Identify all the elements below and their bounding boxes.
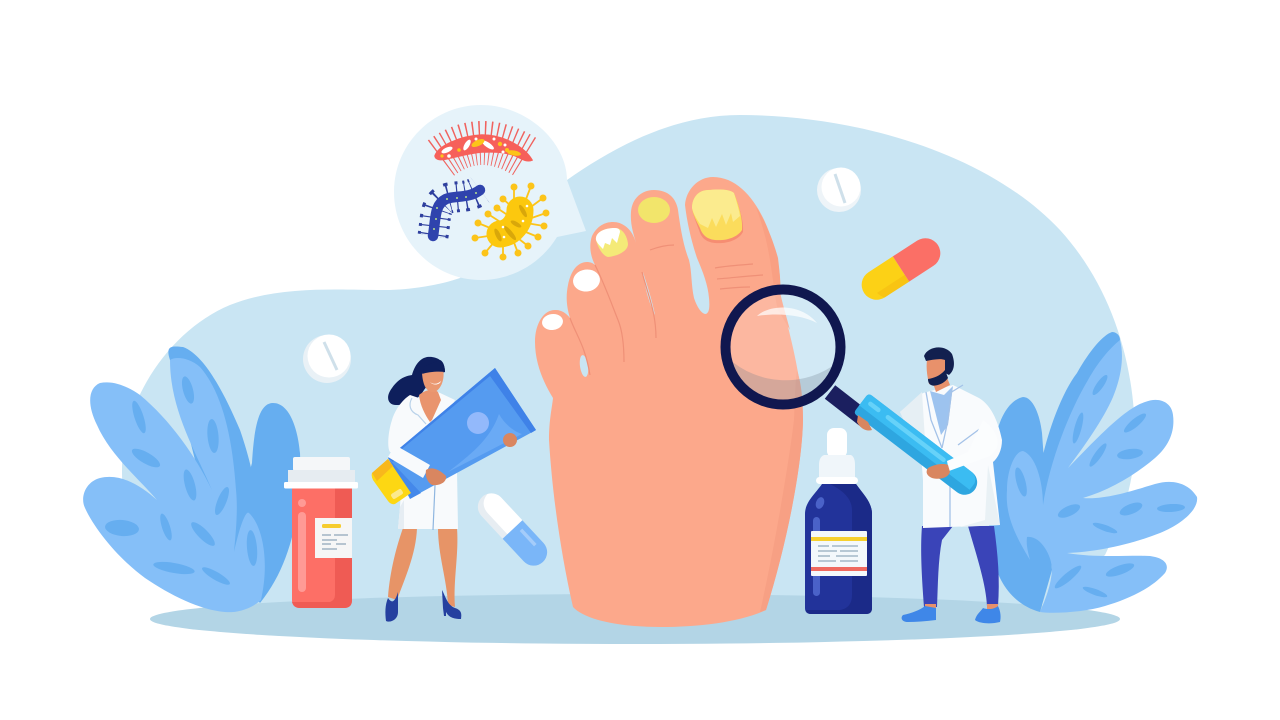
foot (535, 177, 803, 627)
chest and neck (419, 390, 441, 422)
speech bubble with microbes (394, 105, 586, 280)
round pill left (303, 334, 351, 383)
test tube handle (853, 393, 982, 500)
trousers (921, 526, 999, 607)
coat (900, 385, 1002, 528)
head (422, 368, 444, 392)
legs (388, 528, 457, 607)
navy dropper bottle (805, 428, 872, 614)
woman doctor (372, 357, 536, 622)
head (927, 358, 950, 392)
second toenail (638, 197, 670, 223)
ointment tube (372, 368, 536, 504)
big toenail (692, 189, 743, 243)
magnifying glass (726, 290, 866, 420)
foot shading (760, 370, 803, 612)
right plant (989, 332, 1197, 613)
background blob (122, 115, 1135, 612)
shirt (930, 386, 953, 435)
ankles (925, 604, 998, 609)
man doctor (853, 347, 1002, 623)
coat (388, 392, 458, 529)
yellow microbe (472, 182, 550, 260)
hair (388, 357, 445, 405)
ground shadow (150, 594, 1120, 644)
capsule top right (856, 232, 946, 306)
shoes (902, 606, 1001, 623)
lapel (410, 398, 426, 424)
fourth toenail (572, 268, 601, 293)
toe creases (570, 245, 763, 375)
bottle label (315, 518, 352, 558)
fifth toenail (541, 313, 564, 331)
left plant (83, 346, 300, 612)
capsule bottom left (472, 488, 553, 571)
round pill top right (817, 168, 861, 212)
tube cap (372, 459, 411, 504)
heels (385, 590, 461, 622)
toe gaps (579, 272, 655, 377)
third toenail (596, 228, 628, 257)
sleeve and hands (947, 420, 998, 471)
red bacterium (435, 135, 532, 161)
red pill bottle (284, 457, 358, 608)
arm and hands (388, 445, 430, 478)
blue worm microbe (433, 190, 480, 236)
dropper label (811, 531, 867, 576)
